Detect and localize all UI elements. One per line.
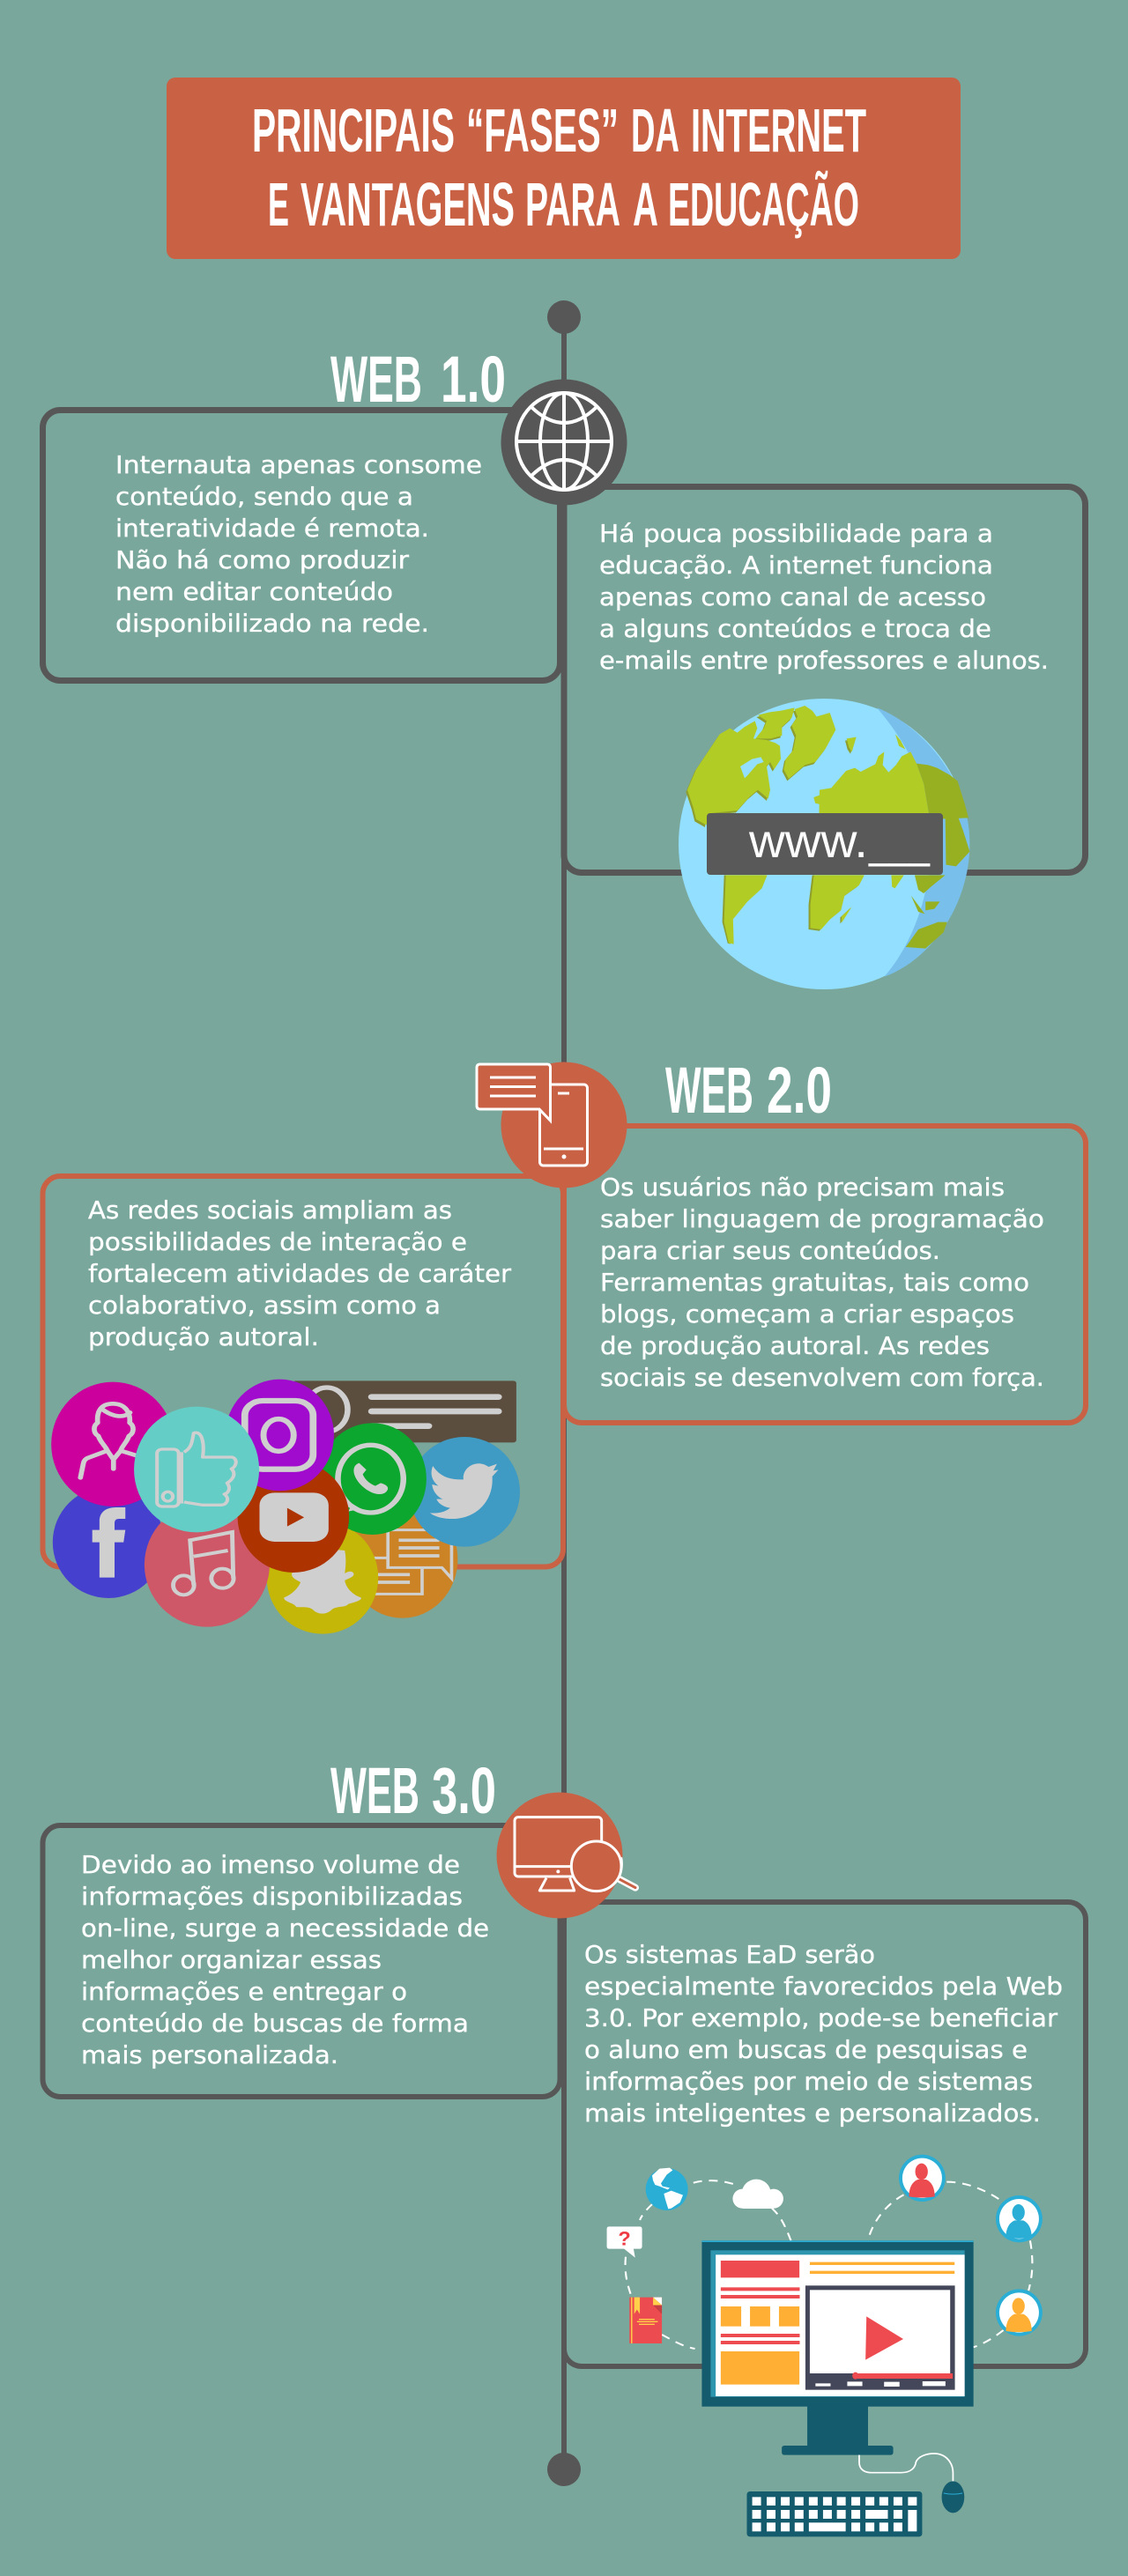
video card xyxy=(293,1381,516,1442)
panel: web 2.0 right: para criar seus conteúdos. xyxy=(600,1236,940,1265)
panel: web 3.0 left: on-line, surge a necessidade de xyxy=(81,1913,489,1943)
panel: web 1.0 left: Não há como produzir xyxy=(115,545,410,574)
panel: web 3.0 right: Os sistemas EaD serão xyxy=(584,1940,875,1969)
panel: web 1.0 right: Há pouca possibilidade para a xyxy=(599,519,993,548)
panel: web 3.0 left: conteúdo de buscas de forma xyxy=(81,2009,469,2038)
heading: web 3.0: 3.0 xyxy=(432,1754,496,1827)
panel: web 2.0 right: blogs, começam a criar espaços xyxy=(600,1299,1014,1329)
keyboard xyxy=(746,2491,922,2536)
panel: web 2.0 right: sociais se desenvolvem com força. xyxy=(600,1363,1044,1392)
panel: web 2.0 left: colaborativo, assim como a xyxy=(88,1291,441,1320)
label: www: www. xyxy=(748,815,868,868)
illustration: social media icon cluster xyxy=(51,1380,520,1634)
panel: web 1.0 left: conteúdo, sendo que a xyxy=(115,482,413,511)
www address bar xyxy=(707,813,943,875)
panel: web 3.0 right: especialmente favorecidos pela Web xyxy=(584,1972,1063,2001)
icon: snapchat xyxy=(267,1521,378,1634)
label: www xyxy=(748,815,931,868)
icon: youtube xyxy=(238,1461,349,1573)
icon: user blue xyxy=(996,2195,1043,2242)
panel: web 3.0 right xyxy=(564,1902,1086,2366)
icon: user red xyxy=(899,2155,946,2202)
panel: web 3.0 left: informações e entregar o xyxy=(81,1977,407,2006)
heading: web 3.0: WEB xyxy=(330,1754,419,1827)
panel: web 3.0 left: mais personalizada. xyxy=(81,2040,338,2069)
dashed connections xyxy=(626,2180,1032,2349)
panel: web 2.0 right: Os usuários não precisam mais xyxy=(600,1173,1005,1202)
mouse and cable xyxy=(859,2454,964,2513)
icon: cloud xyxy=(732,2180,783,2209)
icon: monitor and magnifier xyxy=(497,1792,635,1919)
heading: web 2.0: 2.0 xyxy=(767,1054,832,1127)
icon: user profile xyxy=(51,1382,174,1506)
title banner: EDUCAÇÃO xyxy=(668,170,859,239)
panel: web 1.0 left xyxy=(42,411,560,680)
panel: web 1.0 right: a alguns conteúdos e troca de xyxy=(599,614,991,643)
icon: phone and speech bubble xyxy=(477,1062,627,1188)
panel: web 3.0 right: mais inteligentes e personalizados. xyxy=(584,2099,1041,2128)
panel: web 3.0 right: 3.0. Por exemplo, pode-se beneficiar xyxy=(584,2003,1058,2032)
panel: web 1.0 left: interatividade é remota. xyxy=(115,514,429,543)
panel: web 1.0 left: nem editar conteúdo xyxy=(115,577,393,606)
title banner: E xyxy=(268,170,289,239)
illustration: earth with www bar xyxy=(679,699,969,989)
title banner: VANTAGENS xyxy=(301,170,515,239)
panel: web 1.0 left: disponibilizado na rede. xyxy=(115,609,429,638)
label: www: ___ xyxy=(868,815,931,868)
icon: facebook xyxy=(53,1486,164,1598)
panel: web 2.0 right: Ferramentas gratuitas, tais como xyxy=(600,1268,1029,1297)
panel: web 3.0 right: informações por meio de sistemas xyxy=(584,2067,1033,2096)
icon: question bubble: ? xyxy=(618,2227,631,2249)
heading: web 2.0: WEB xyxy=(665,1054,753,1127)
panel: web 3.0 right: o aluno em buscas de pesquisas e xyxy=(584,2035,1028,2064)
icon: twitter xyxy=(409,1437,520,1547)
title banner: DA xyxy=(631,96,679,165)
panel: web 2.0 right: de produção autoral. As redes xyxy=(600,1331,990,1360)
panel: web 3.0 left: Devido ao imenso volume de xyxy=(81,1850,460,1879)
panel: web 1.0 right: educação. A internet funciona xyxy=(599,551,993,580)
panel: web 2.0 left: produção autoral. xyxy=(88,1322,319,1351)
icon: globe wireframe xyxy=(501,379,627,506)
icon: instagram xyxy=(226,1380,334,1491)
heading: web 1.0: WEB xyxy=(330,343,422,416)
panel: web 3.0 left: informações disponibilizadas xyxy=(81,1882,463,1911)
icon: chat xyxy=(347,1500,457,1618)
panel: web 1.0 right xyxy=(564,486,1086,872)
title banner: “FASES” xyxy=(466,96,619,165)
heading: web 1.0: 1.0 xyxy=(441,343,506,416)
icon: music xyxy=(145,1502,270,1627)
monitor xyxy=(701,2240,974,2455)
timeline xyxy=(547,300,581,2486)
panel: web 1.0 right: e-mails entre professores e alunos. xyxy=(599,646,1049,675)
icon: thumbs up xyxy=(134,1407,259,1532)
icon: book xyxy=(629,2298,662,2343)
title banner: PARA xyxy=(525,170,620,239)
title banner: PRINCIPAIS xyxy=(252,96,455,165)
panel: web 3.0 left xyxy=(42,1825,560,2097)
icon: whatsapp xyxy=(318,1423,427,1535)
panel: web 2.0 left: fortalecem atividades de caráter xyxy=(88,1259,512,1288)
icon: small earth xyxy=(646,2168,688,2210)
title banner: A xyxy=(633,170,658,239)
panel: web 2.0 left: As redes sociais ampliam as xyxy=(88,1195,452,1225)
illustration: computer network xyxy=(607,2155,1043,2536)
title banner xyxy=(167,78,961,259)
title banner: INTERNET xyxy=(691,96,866,165)
panel: web 3.0 left: melhor organizar essas xyxy=(81,1945,382,1974)
panel: web 2.0 right xyxy=(564,1126,1086,1423)
panel: web 2.0 left xyxy=(42,1176,563,1566)
icon: user orange xyxy=(996,2289,1043,2336)
panel: web 1.0 right: apenas como canal de acesso xyxy=(599,582,986,611)
panel: web 1.0 left: Internauta apenas consome xyxy=(115,450,482,479)
icon: question bubble xyxy=(607,2226,642,2258)
panel: web 2.0 left: possibilidades de interação e xyxy=(88,1227,467,1256)
panel: web 2.0 right: saber linguagem de programação xyxy=(600,1204,1044,1233)
